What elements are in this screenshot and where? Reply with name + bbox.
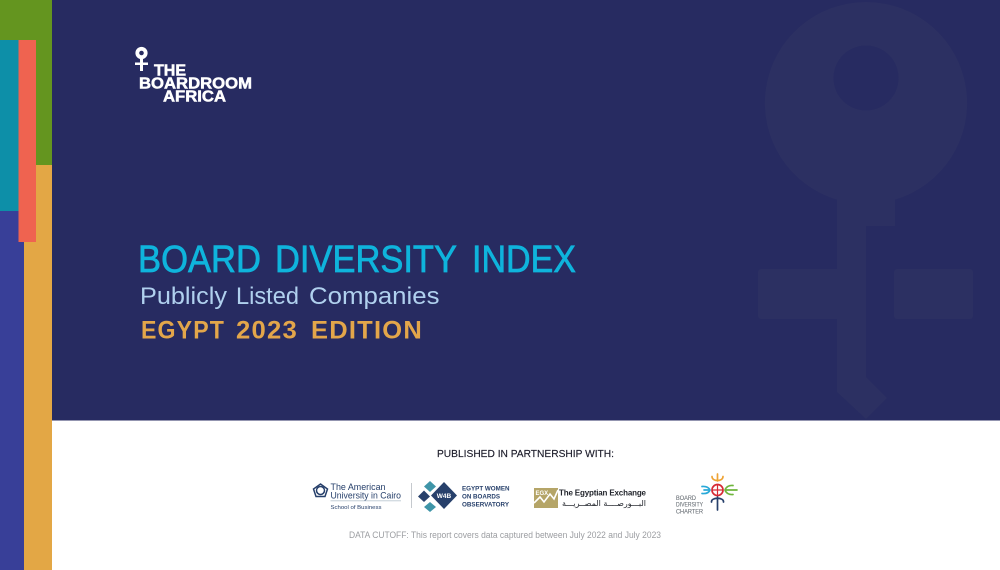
watermark: female symbol key xyxy=(758,2,973,419)
logo wordmark: AFRICA xyxy=(163,88,226,106)
edition line: 2023 xyxy=(236,316,298,344)
edition line: EDITION xyxy=(311,316,423,344)
subtitle: Listed xyxy=(236,283,299,310)
subtitle: Publicly xyxy=(140,283,227,310)
charter wordmark xyxy=(676,495,704,516)
observatory wordmark xyxy=(462,486,510,508)
charter wordmark: BOARD xyxy=(676,495,696,502)
AUC wordmark: The American xyxy=(330,482,386,493)
partnership heading: PUBLISHED IN PARTNERSHIP WITH: xyxy=(437,448,614,460)
AUC wordmark xyxy=(330,482,401,511)
observatory wordmark: EGYPT WOMEN xyxy=(462,486,510,492)
exchange wordmark: The Egyptian Exchange xyxy=(559,488,647,498)
logo: The Egyptian Exchange xyxy=(534,488,647,508)
title: INDEX xyxy=(472,239,576,281)
logo: Egypt Women on Boards Observatory xyxy=(418,481,510,512)
icon: AUC emblem xyxy=(314,484,328,496)
icon: diamonds: W4B xyxy=(437,493,452,500)
observatory wordmark: OBSERVATORY xyxy=(462,502,510,508)
icon: charter emblem xyxy=(702,474,737,510)
charter wordmark: CHARTER xyxy=(676,508,703,516)
subtitle xyxy=(140,283,440,310)
title: BOARD xyxy=(138,239,261,281)
AUC wordmark: School of Business xyxy=(330,505,382,511)
logo wordmark: THE xyxy=(154,62,186,80)
subtitle: Companies xyxy=(309,283,440,310)
title xyxy=(138,239,576,281)
logo: American University in Cairo xyxy=(314,482,401,511)
title: DIVERSITY xyxy=(275,239,457,281)
icon: EGX chart: EGX xyxy=(536,491,548,497)
charter wordmark: DIVERSITY xyxy=(676,502,704,508)
observatory wordmark: ON BOARDS xyxy=(462,494,501,500)
AUC wordmark: University in Cairo xyxy=(330,490,401,502)
edition line xyxy=(141,316,423,344)
logo wordmark xyxy=(139,62,252,106)
edition line: EGYPT xyxy=(141,316,225,344)
colour bars on left edge xyxy=(0,0,52,570)
Arabic wordmark: البـــورصــــة المصــريـــة xyxy=(562,499,646,508)
logo: The Boardroom Africa xyxy=(135,49,252,106)
icon: key pin xyxy=(135,49,148,71)
logo: Board Diversity Charter xyxy=(676,474,737,516)
logo wordmark: BOARDROOM xyxy=(139,76,252,92)
panel: navy cover background xyxy=(52,0,1000,420)
data cutoff note: DATA CUTOFF: This report covers data captured between July 2022 and July 2023 xyxy=(349,530,661,540)
